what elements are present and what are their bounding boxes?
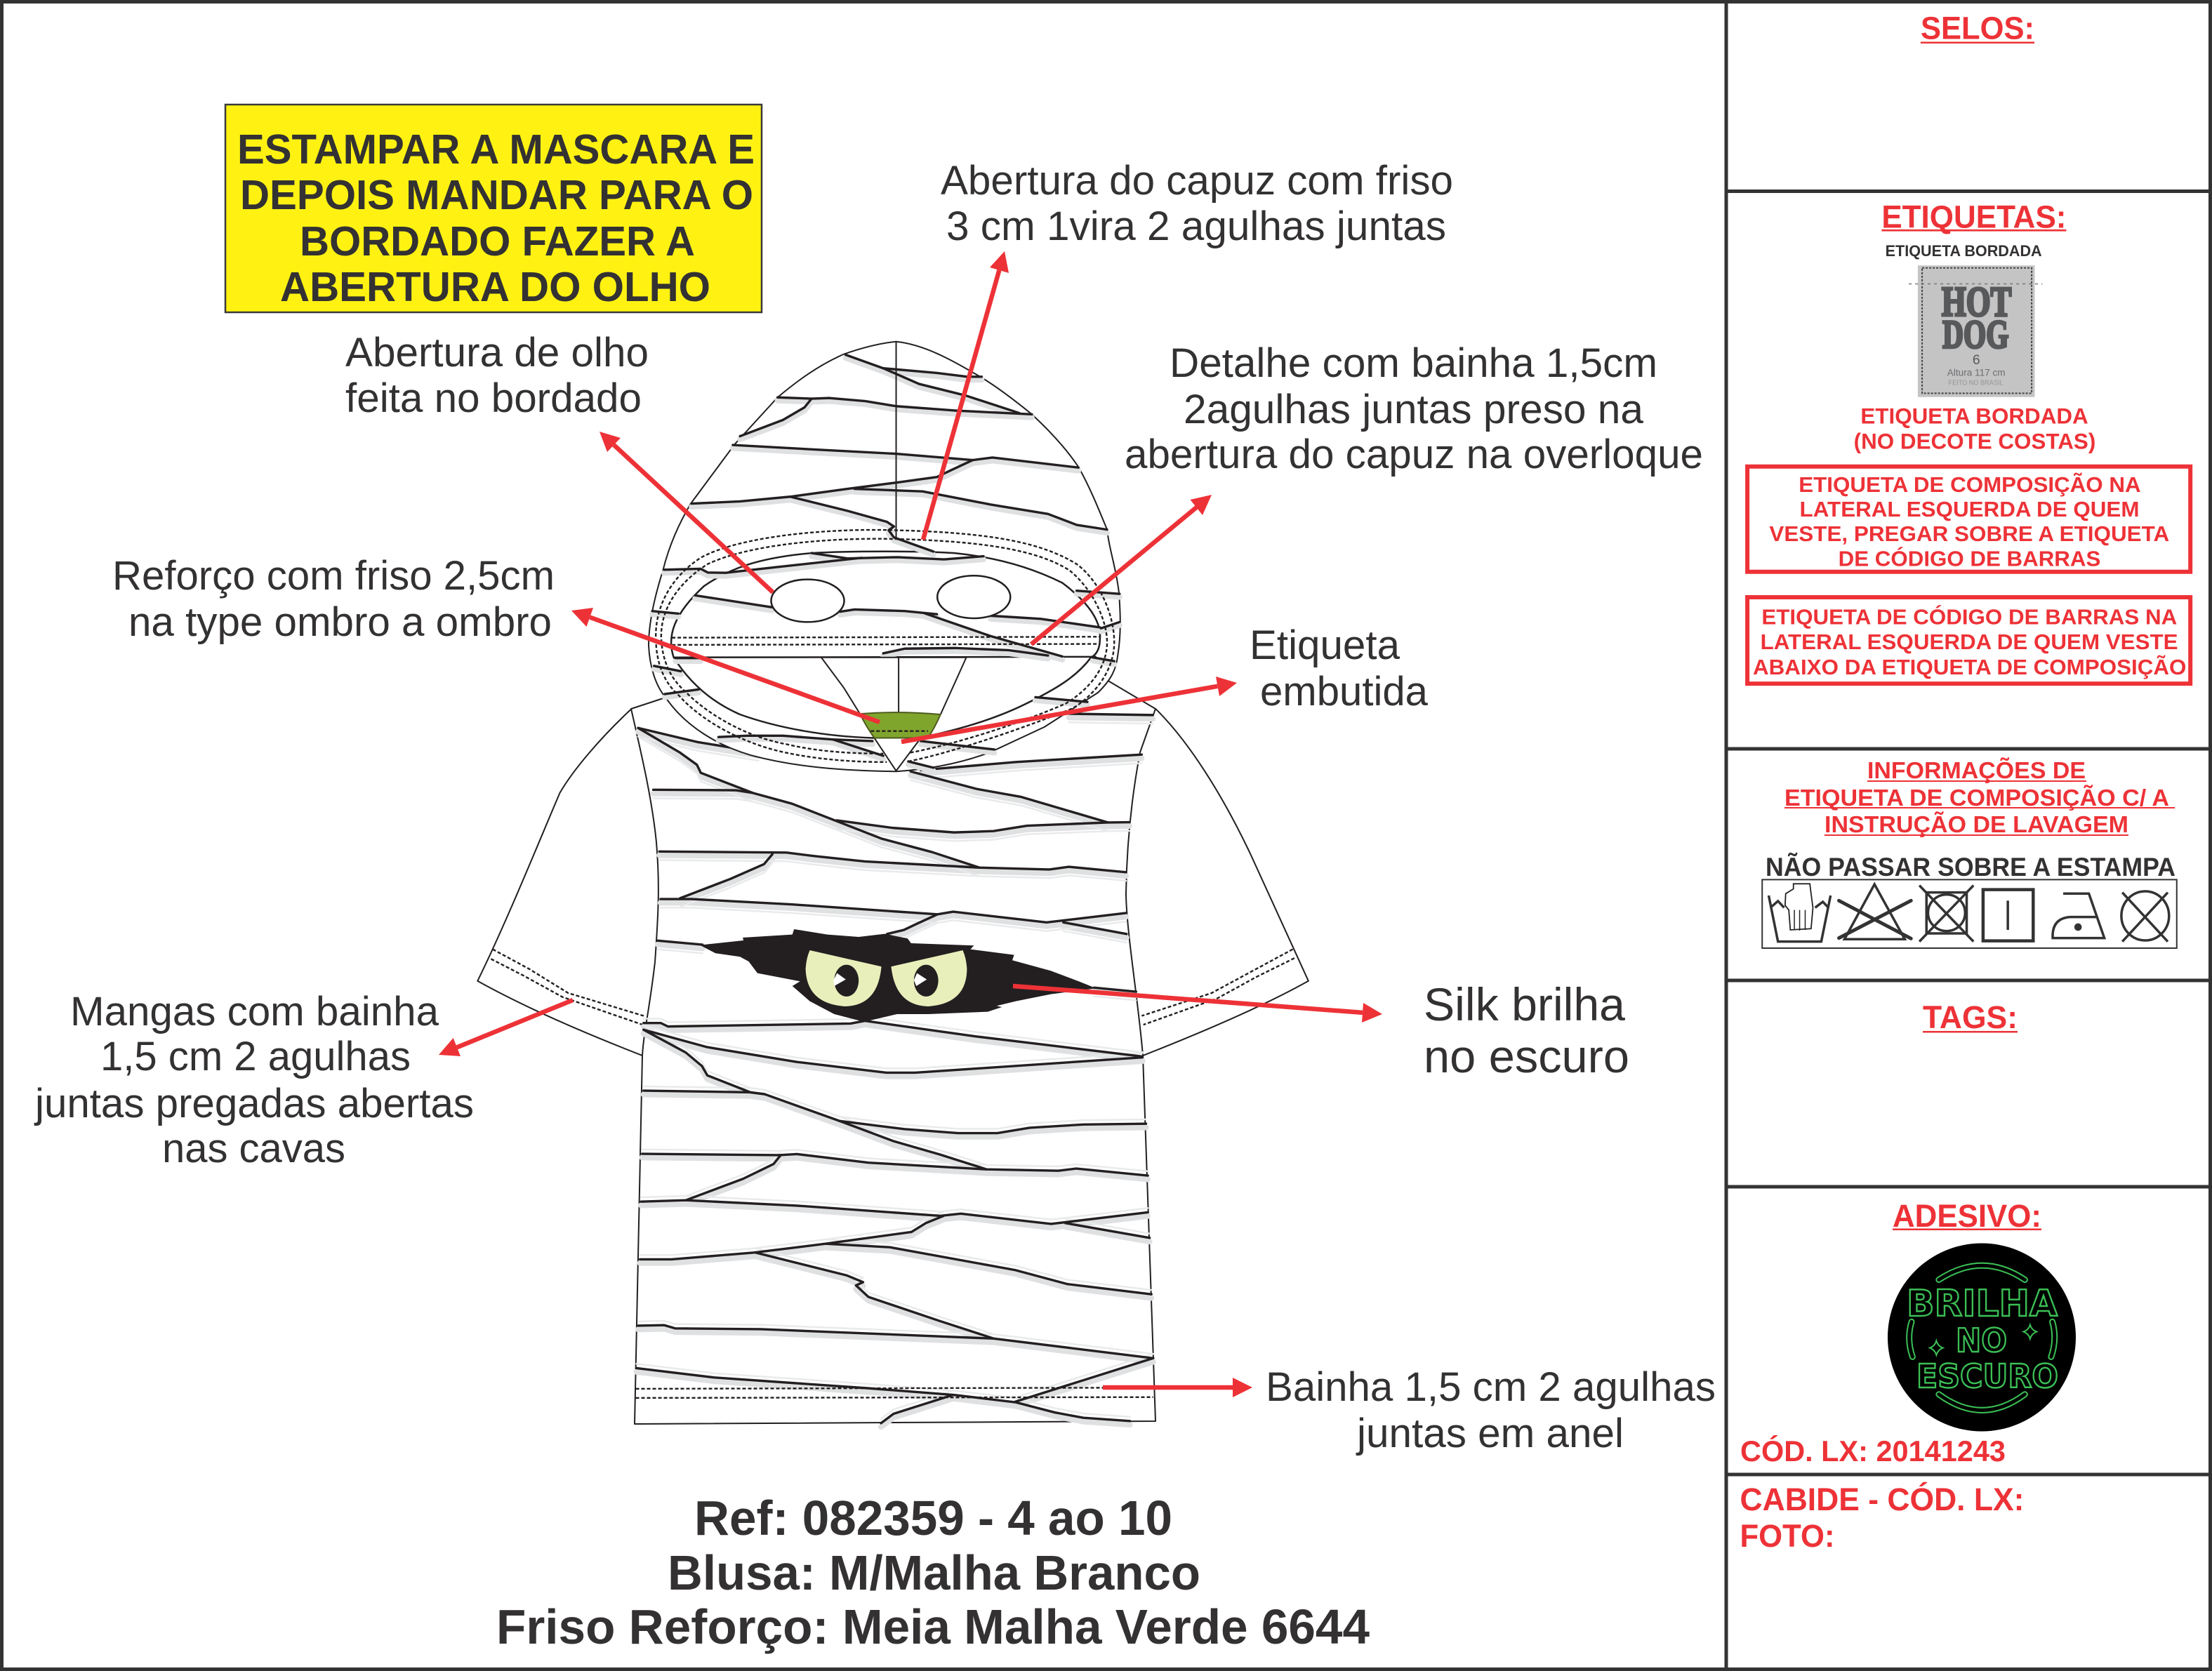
- callout: hem detail: abertura do capuz na overloque: [1125, 432, 1703, 477]
- callout: eye opening: [345, 330, 649, 421]
- embroidered label image: Altura 117 cm: [1947, 367, 2006, 378]
- shirt body: [631, 677, 1155, 1424]
- embroidered label image: 6: [1973, 352, 1980, 368]
- label placement note: ETIQUETA BORDADA: [1860, 404, 2088, 429]
- barcode label box: ABAIXO DA ETIQUETA DE COMPOSIÇÃO: [1753, 655, 2186, 679]
- panel: selos: SELOS:: [1921, 10, 2034, 46]
- embroidered label image: [1909, 265, 2043, 397]
- arrow: hem detail: [1031, 495, 1212, 644]
- callout: eye opening: feita no bordado: [345, 375, 642, 421]
- embroidered label image: DOG: [1942, 312, 2008, 357]
- care symbols: [1762, 879, 2177, 948]
- warning text: NÃO PASSAR SOBRE A ESTAMPA: [1766, 852, 2175, 881]
- glow in the dark sticker: NO: [1956, 1322, 2007, 1359]
- callout: sleeves: [34, 989, 474, 1171]
- panel: cabide and foto: CABIDE - CÓD. LX:: [1740, 1482, 2025, 1517]
- callout: silk print: Silk brilha: [1424, 978, 1625, 1030]
- callout: reinforcement: na type ombro a ombro: [128, 599, 552, 645]
- glow in the dark eyes print: [700, 929, 1096, 1022]
- composition label box: DE CÓDIGO DE BARRAS: [1839, 547, 2100, 571]
- label caption: ETIQUETA BORDADA: [1886, 242, 2042, 260]
- barcode label box: ETIQUETA DE CÓDIGO DE BARRAS NA: [1761, 605, 2177, 629]
- right sleeve: [1141, 709, 1309, 1056]
- composition label box: ETIQUETA DE COMPOSIÇÃO NA: [1799, 473, 2141, 497]
- composition label box: VESTE, PREGAR SOBRE A ETIQUETA: [1769, 523, 2169, 546]
- arrow: bottom hem: [1103, 1378, 1252, 1397]
- callout: silk print: no escuro: [1424, 1030, 1629, 1082]
- callout: silk print: [1424, 978, 1629, 1082]
- label placement note: (NO DECOTE COSTAS): [1854, 429, 2095, 453]
- arrow: eye opening: [600, 432, 773, 592]
- callout: sleeves: nas cavas: [162, 1126, 345, 1171]
- eye opening left: [771, 580, 845, 622]
- glow in the dark sticker: BRILHA: [1907, 1283, 2058, 1325]
- callout: sleeves: juntas pregadas abertas: [34, 1081, 474, 1126]
- panel: tags: TAGS:: [1923, 999, 2018, 1035]
- heading: composition information: INFORMAÇÕES DE: [1867, 757, 2086, 783]
- panel: adesivo: [1740, 1198, 2076, 1467]
- composition label box: LATERAL ESQUERDA DE QUEM: [1800, 498, 2139, 521]
- panel: cabide and foto: [1740, 1482, 2025, 1554]
- sticker code: CÓD. LX: 20141243: [1740, 1434, 2006, 1467]
- yellow instruction box: BORDADO FAZER A: [300, 218, 695, 265]
- label placement note: [1854, 404, 2095, 453]
- icon: no bleach: [1839, 884, 1911, 939]
- icon: no dry clean: [2121, 891, 2169, 942]
- callout: reinforcement: [112, 553, 555, 645]
- product reference: Ref: 082359 - 4 ao 10: [694, 1491, 1172, 1545]
- garment technical drawing: [477, 342, 1309, 1427]
- embroidered label image: HOT: [1942, 279, 2011, 326]
- callout: sleeves: Mangas com bainha: [70, 989, 439, 1034]
- barcode label box: [1747, 597, 2190, 684]
- heading: etiquetas: ETIQUETAS:: [1881, 199, 2066, 235]
- product reference: Blusa: M/Malha Branco: [668, 1545, 1200, 1600]
- icon: iron: [2053, 893, 2105, 938]
- panel: composition information: [1762, 757, 2177, 948]
- callout: embedded label: [1250, 623, 1429, 714]
- product reference: [496, 1491, 1370, 1654]
- icon: hand wash: [1768, 884, 1831, 942]
- arrow: silk print: [1013, 986, 1382, 1023]
- yellow instruction box: DEPOIS MANDAR PARA O: [240, 172, 753, 218]
- icon: line dry: [1983, 890, 2033, 941]
- heading: composition information: [1784, 757, 2175, 837]
- panel: cabide and foto: FOTO:: [1740, 1518, 1835, 1554]
- product reference: Friso Reforço: Meia Malha Verde 6644: [496, 1599, 1370, 1654]
- callout: eye opening: Abertura de olho: [345, 330, 649, 375]
- glow in the dark sticker: ESCURO: [1916, 1357, 2058, 1395]
- callout: hood opening: Abertura do capuz com friso: [941, 158, 1453, 204]
- heading: adesivo: ADESIVO:: [1893, 1198, 2041, 1234]
- panel: etiquetas: [1747, 199, 2190, 684]
- left sleeve: [477, 709, 644, 1056]
- callout: reinforcement: Reforço com friso 2,5cm: [112, 553, 555, 599]
- callout: embedded label: embutida: [1260, 669, 1429, 714]
- callout: hood opening: [941, 158, 1453, 249]
- callout: sleeves: 1,5 cm 2 agulhas: [100, 1034, 411, 1079]
- heading: composition information: ETIQUETA DE COMPOSIÇÃO C/ A: [1784, 785, 2169, 811]
- arrow: sleeves: [439, 1000, 573, 1056]
- barcode label box: LATERAL ESQUERDA DE QUEM VESTE: [1761, 631, 2178, 654]
- yellow instruction box: ABERTURA DO OLHO: [280, 264, 710, 310]
- inner neck and green rib: [821, 658, 967, 771]
- hood: [649, 342, 1120, 771]
- callout: hem detail: 2agulhas juntas preso na: [1184, 387, 1644, 432]
- callout: bottom hem: Bainha 1,5 cm 2 agulhas: [1266, 1364, 1716, 1410]
- embroidered label image: FEITO NO BRASIL: [1949, 379, 2004, 387]
- callout: hem detail: [1125, 340, 1703, 477]
- callout: hood opening: 3 cm 1vira 2 agulhas juntas: [946, 204, 1446, 249]
- bandage lines on lower body: [636, 1016, 1153, 1427]
- arrow: reinforcement: [571, 608, 880, 722]
- callout: bottom hem: [1266, 1364, 1716, 1456]
- arrow: hood opening: [923, 251, 1009, 540]
- callout: hem detail: Detalhe com bainha 1,5cm: [1170, 340, 1657, 386]
- bandage lines on upper body: [638, 714, 1153, 1000]
- composition label box: [1747, 467, 2190, 572]
- yellow instruction box: [225, 105, 762, 312]
- callout: embedded label: Etiqueta: [1250, 623, 1400, 668]
- arrow: embedded label: [901, 677, 1237, 742]
- heading: composition information: INSTRUÇÃO DE LAVAGEM: [1824, 811, 2128, 837]
- icon: no tumble dry: [1919, 886, 1973, 942]
- yellow instruction box: ESTAMPAR A MASCARA E: [237, 126, 755, 173]
- glow in the dark sticker: [1888, 1244, 2076, 1432]
- eye opening right: [937, 575, 1010, 618]
- callout: bottom hem: juntas em anel: [1356, 1411, 1624, 1456]
